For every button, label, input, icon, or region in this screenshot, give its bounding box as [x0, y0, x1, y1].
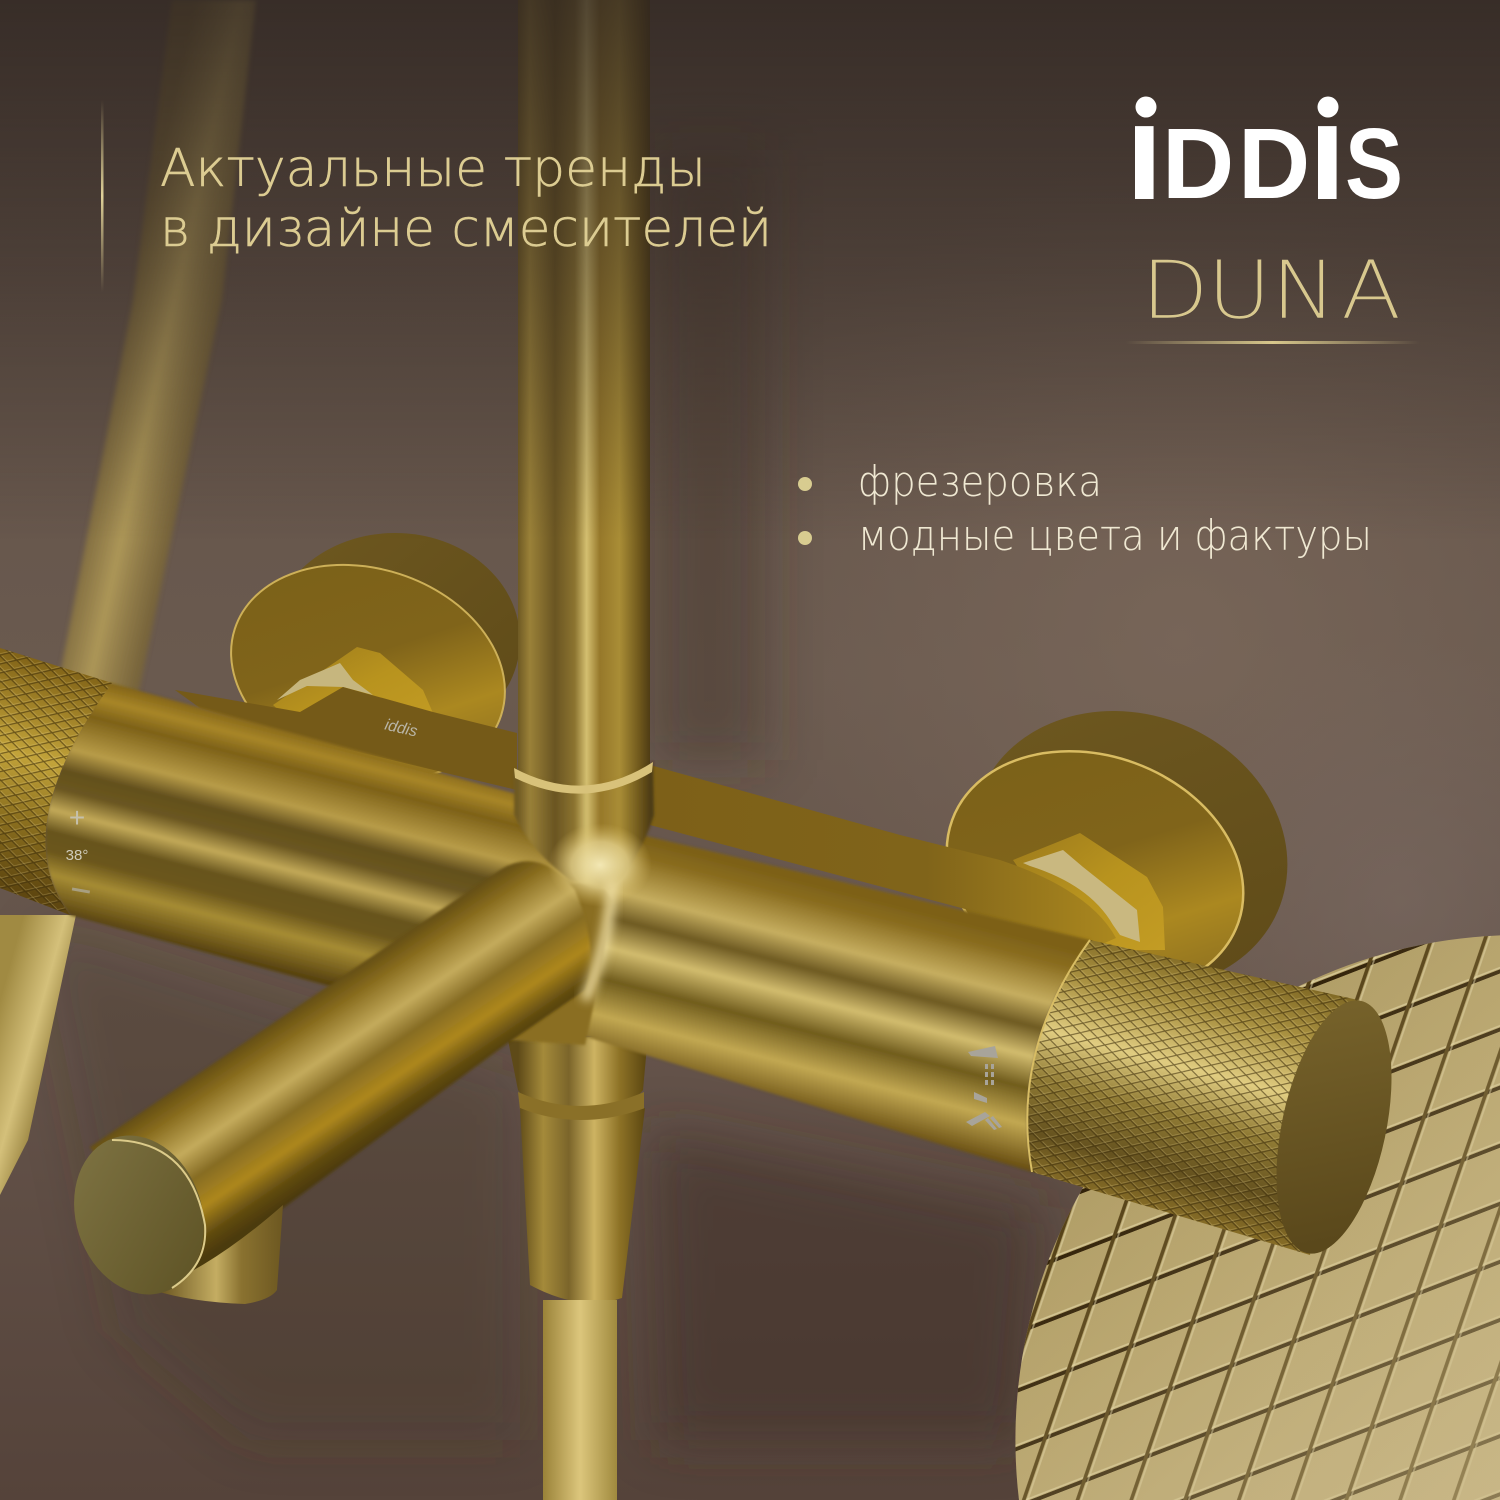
- junction highlights: [548, 823, 652, 1000]
- bullet list: [798, 457, 1372, 560]
- hose bottom: [543, 1300, 617, 1500]
- decorative accent: vertical line: [101, 100, 104, 292]
- mixer body left cylinder: [45, 683, 600, 1000]
- right knurled knob: [1027, 940, 1358, 1255]
- bullet list: фрезеровка: [858, 457, 1102, 506]
- series name DUNA: DUNA: [1141, 244, 1401, 337]
- flat back strip left: [175, 687, 517, 790]
- left knurled knob: [0, 648, 112, 915]
- top dark vignette: [0, 0, 1500, 540]
- temperature scale: minus: [72, 887, 90, 894]
- bullet list: модные цвета и фактуры: [858, 511, 1372, 560]
- spout end cap: [54, 1118, 224, 1312]
- flat back strip right: [650, 765, 1116, 945]
- logo underline: [1125, 341, 1420, 344]
- spout nozzle: [153, 1205, 283, 1304]
- icons: water outlets on body: [966, 1046, 1002, 1130]
- brushed shower disc with diamond relief: [1015, 935, 1500, 1500]
- wall flange right: [912, 667, 1327, 1033]
- hose lower left: [0, 915, 76, 1195]
- wall flange left: [203, 531, 533, 813]
- wall shadows: [40, 150, 1040, 1440]
- hex nut left: [273, 647, 436, 730]
- mixer body right cylinder: [575, 830, 1090, 1172]
- knob end cap: [1256, 990, 1412, 1264]
- title: Актуальные тренды: [160, 139, 706, 199]
- engraved brand on body: iddis: [383, 717, 419, 741]
- collar and central junction: [470, 762, 654, 1045]
- brand logo iDDiS: i: [1125, 75, 1163, 229]
- lower connector: [508, 1035, 648, 1303]
- title: в дизайне смесителей: [160, 199, 772, 259]
- temperature scale: 38 degrees: 38°: [66, 847, 88, 864]
- brand logo iDDiS: D: [1238, 108, 1310, 220]
- hex nut right: [1013, 833, 1165, 950]
- brand logo iDDiS: S: [1345, 108, 1403, 220]
- hose upper: [55, 0, 256, 700]
- brand logo iDDiS: i: [1308, 75, 1346, 229]
- brand logo iDDiS: [1125, 75, 1403, 229]
- brand logo iDDiS: D: [1162, 108, 1234, 220]
- vertical pipe: [518, 0, 650, 790]
- spout: [90, 861, 591, 1290]
- temperature scale: plus: +: [69, 802, 85, 833]
